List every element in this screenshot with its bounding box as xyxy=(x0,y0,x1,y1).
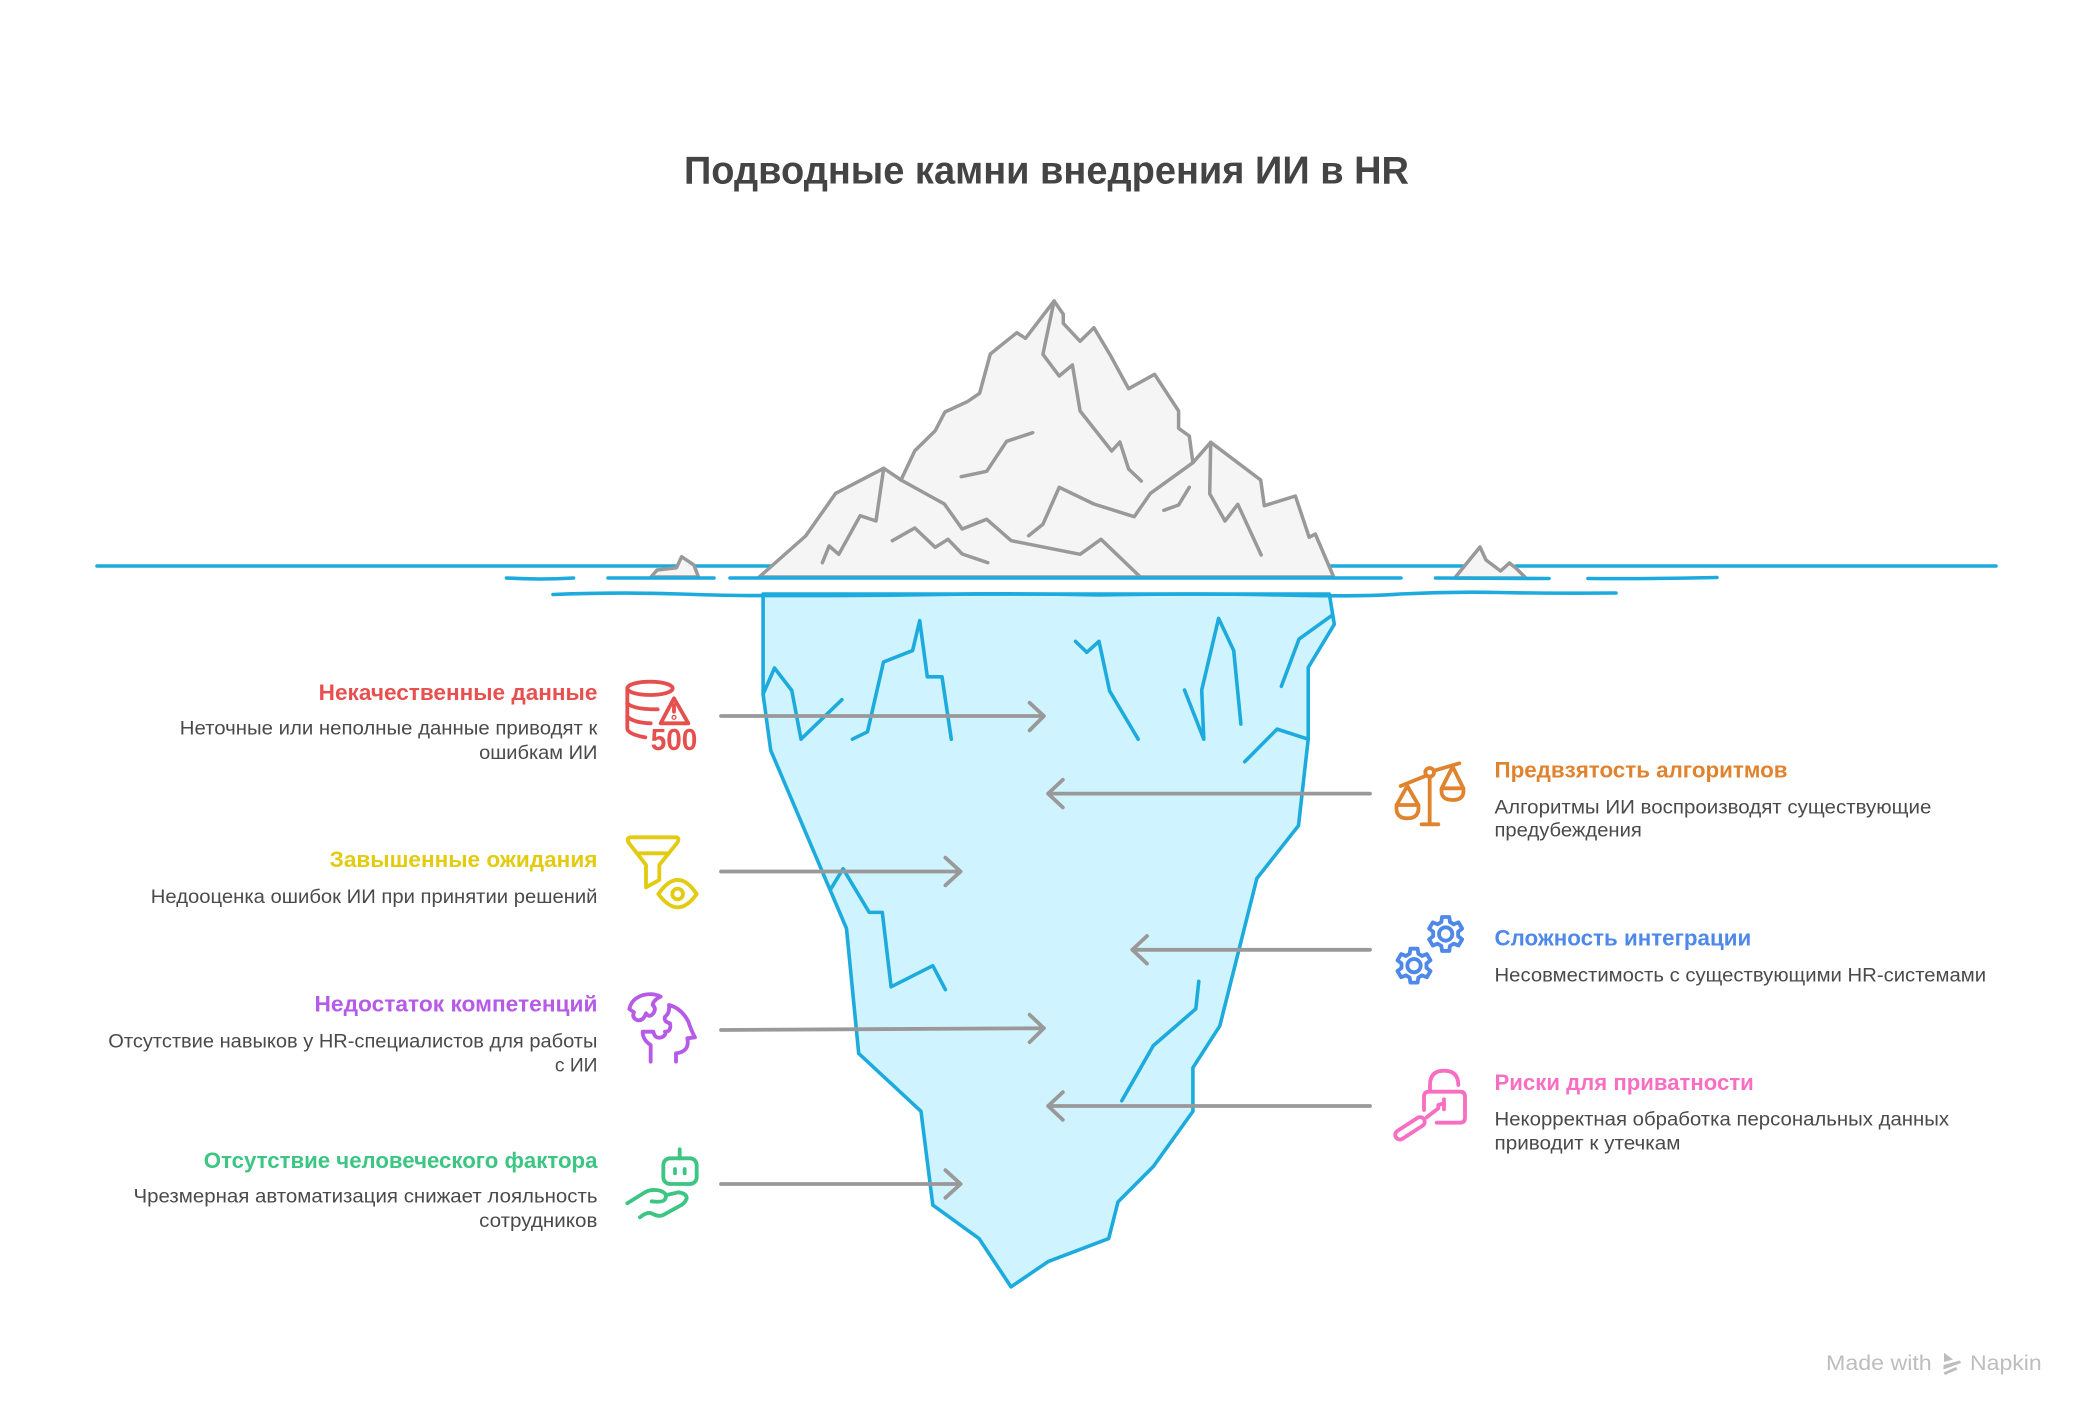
arrow xyxy=(721,1015,1044,1042)
description: Чрезмерная автоматизация снижает лояльность xyxy=(134,1186,598,1207)
title: Подводные камни внедрения ИИ в HR xyxy=(684,150,1409,192)
description: приводит к утечкам xyxy=(1494,1133,1680,1154)
item: Недостаток компетенций xyxy=(108,991,1044,1076)
watermark: Made with xyxy=(1826,1352,1932,1375)
heading: Отсутствие человеческого фактора xyxy=(204,1148,598,1173)
heading: Предвзятость алгоритмов xyxy=(1494,758,1788,783)
water surface top line xyxy=(97,564,1996,568)
description: предубеждения xyxy=(1494,821,1642,842)
icon: hand with robot xyxy=(627,1149,697,1217)
arrow xyxy=(721,858,961,885)
description xyxy=(180,718,598,764)
icon: scales xyxy=(1396,763,1464,824)
heading: Недостаток компетенций xyxy=(314,991,598,1016)
heading: Риски для приватности xyxy=(1494,1070,1754,1095)
icon: funnel and eye xyxy=(628,837,697,907)
heading: Сложность интеграции xyxy=(1494,926,1751,951)
description: Неточные или неполные данные приводят к xyxy=(180,718,598,739)
description: сотрудников xyxy=(479,1211,597,1232)
description xyxy=(108,1031,598,1076)
heading: Некачественные данные xyxy=(319,680,597,705)
description xyxy=(134,1186,598,1232)
item: Завышенные ожидания xyxy=(151,837,961,908)
underwater cracks xyxy=(763,615,1332,1101)
arrow xyxy=(1132,936,1370,964)
item: Сложность интеграции xyxy=(1132,917,1986,986)
heading: Завышенные ожидания xyxy=(330,847,597,872)
item: Риски для приватности xyxy=(1048,1070,1950,1154)
description: с ИИ xyxy=(555,1055,598,1076)
arrow xyxy=(721,703,1044,730)
icon: napkin logo xyxy=(1944,1353,1961,1375)
icon: gears xyxy=(1397,917,1462,983)
description: Некорректная обработка персональных данных xyxy=(1494,1109,1950,1130)
iceberg illustration xyxy=(97,301,1996,1287)
description: Несовместимость с существующими HR-системами xyxy=(1494,965,1986,986)
watermark xyxy=(1826,1352,2042,1375)
underwater iceberg body xyxy=(763,594,1334,1287)
item: Отсутствие человеческого фактора xyxy=(134,1148,961,1232)
watermark: Napkin xyxy=(1970,1352,2042,1375)
icon: database warning 500 xyxy=(627,682,697,757)
description: ошибкам ИИ xyxy=(479,743,597,764)
arrow xyxy=(1048,780,1370,807)
above-water iceberg xyxy=(759,301,1334,577)
icon: database warning 500: 500 xyxy=(651,722,697,757)
arrow xyxy=(1048,1092,1370,1120)
item: Некачественные данные xyxy=(180,680,1044,764)
right small rock xyxy=(1455,547,1526,578)
description: Отсутствие навыков у HR-специалистов для работы xyxy=(108,1031,597,1052)
water surface middle line xyxy=(506,578,1717,579)
item: Предвзятость алгоритмов xyxy=(1048,758,1931,842)
icon: lock and pick xyxy=(1393,1071,1465,1141)
description xyxy=(1494,797,1931,842)
left small rock xyxy=(651,557,698,577)
description: Недооценка ошибок ИИ при принятии решений xyxy=(151,887,598,908)
water surface lower wavy line xyxy=(553,592,1616,596)
icon: puzzle head xyxy=(629,994,695,1062)
description xyxy=(1494,1109,1950,1154)
description: Алгоритмы ИИ воспроизводят существующие xyxy=(1494,797,1931,818)
arrow xyxy=(721,1170,961,1198)
iceberg ridge lines xyxy=(822,301,1261,576)
underwater part of the iceberg xyxy=(763,594,1334,1287)
